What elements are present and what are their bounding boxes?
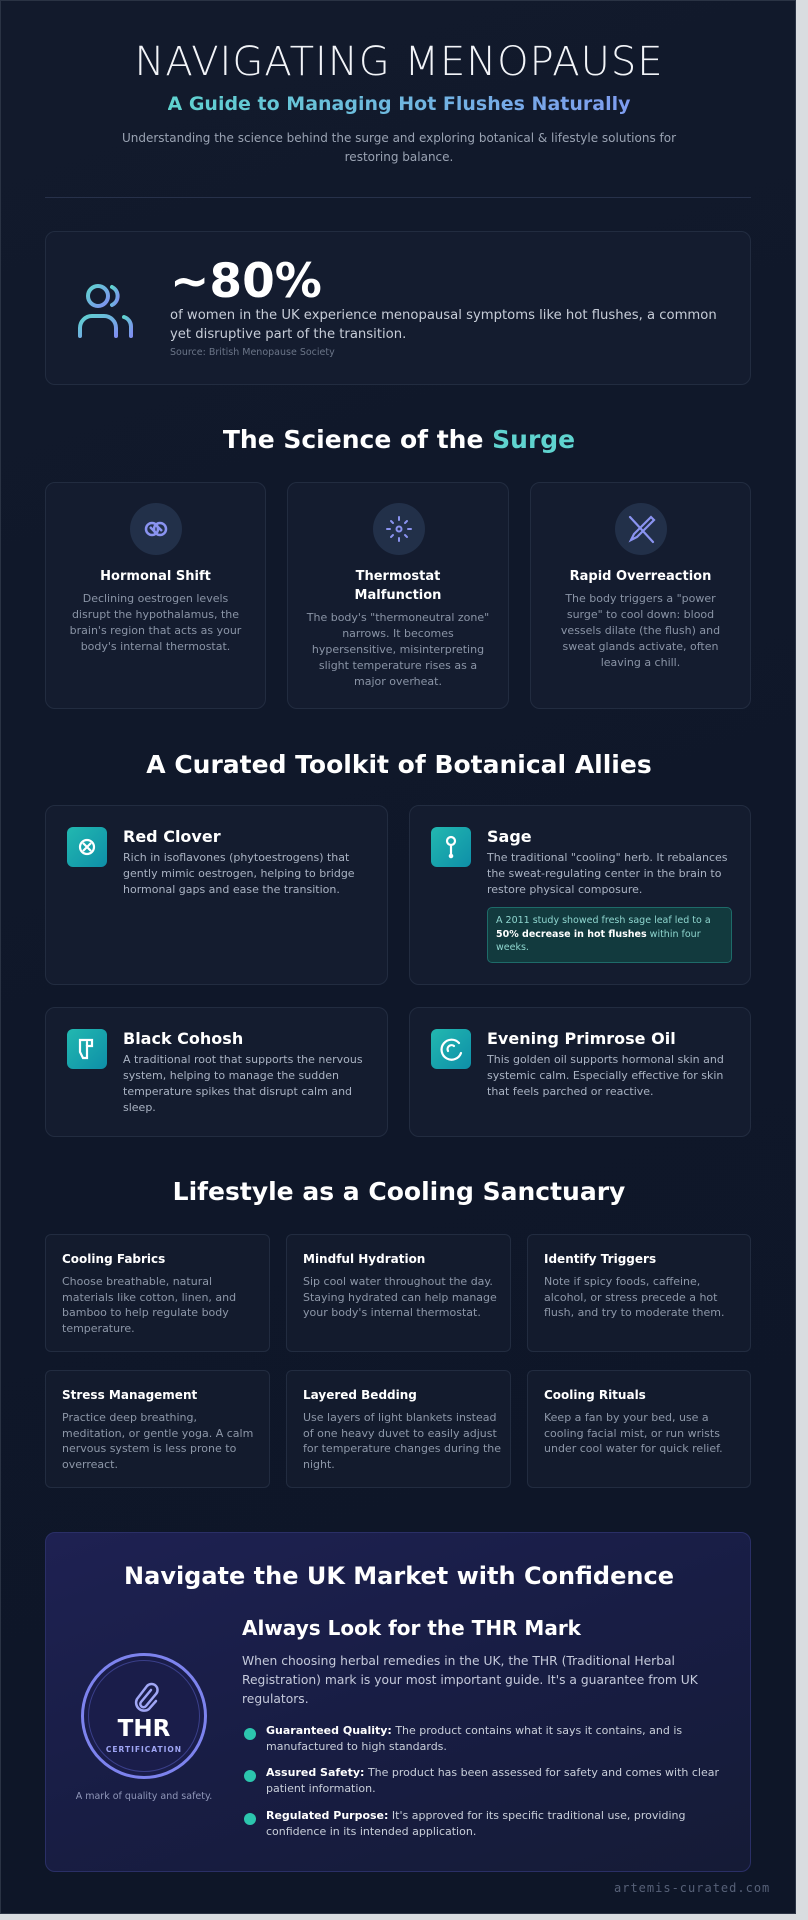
heading: lifestyle: Lifestyle as a Cooling Sanctuary (173, 1177, 625, 1206)
source: Source: British Menopause Society (170, 347, 335, 358)
card: stress management (45, 1370, 270, 1488)
card: cooling fabrics: materials like cotton, linen, and (62, 1290, 236, 1304)
badge: THR: CERTIFICATION (106, 1745, 182, 1754)
panel: thermostat: major overheat. (354, 675, 442, 688)
card: identify triggers (527, 1234, 751, 1352)
card: cooling fabrics: temperature. (62, 1322, 135, 1334)
panel: hormonal shift: disrupt the hypothalamus, the (72, 608, 239, 621)
card: identify triggers: Note if spicy foods, caffeine, (544, 1275, 700, 1288)
card: cooling fabrics: Cooling Fabrics (62, 1252, 165, 1266)
subheading: THR mark: Always Look for the THR Mark (242, 1616, 581, 1640)
icon: clover (67, 827, 107, 867)
panel: hormonal shift (45, 482, 266, 709)
panel: rapid overreaction: surge" to cool down: blood (567, 608, 714, 621)
panel: evening primrose: that feels parched or reactive. (487, 1085, 654, 1098)
panel: black cohosh: A traditional root that supports the nervous (123, 1053, 363, 1066)
panel: rapid overreaction: The body triggers a "power (565, 592, 716, 605)
card: layered bedding (286, 1370, 511, 1488)
card: mindful hydration: Mindful Hydration (303, 1252, 425, 1266)
icon: users (78, 284, 133, 338)
panel: rapid overreaction: vessels dilate (the flush) and (561, 624, 720, 637)
intro text: Understanding the science behind the surge and exploring botanical & lifestyle solutions for (122, 131, 676, 145)
icon: root (67, 1029, 107, 1069)
subtitle: A Guide to Managing Hot Flushes Naturally (168, 93, 630, 115)
stat number: ~80% (170, 254, 322, 309)
panel: evening primrose (409, 1007, 751, 1137)
card: mindful hydration (286, 1234, 511, 1352)
card: cooling rituals: Keep a fan by your bed, use a (544, 1411, 709, 1424)
callout: sage study (487, 907, 732, 963)
panel: black cohosh: sleep. (123, 1101, 156, 1114)
panel: rapid overreaction: sweat glands activate, often (563, 640, 718, 653)
badge: THR: THR (118, 1716, 170, 1742)
panel: black cohosh: Black Cohosh (123, 1029, 243, 1048)
bullet: safety: patient information. (266, 1782, 376, 1795)
panel: thermostat: hypersensitive, misinterpreting (312, 643, 484, 656)
card: layered bedding: Layered Bedding (303, 1388, 417, 1402)
card: identify triggers: flush, and try to moderate them. (544, 1306, 724, 1319)
panel: black cohosh: temperature spikes that disrupt calm and (123, 1085, 352, 1098)
card: cooling fabrics: bamboo to help regulate body (62, 1306, 229, 1319)
stat text (170, 308, 717, 342)
panel: black cohosh (45, 1007, 388, 1137)
panel: rapid overreaction: Rapid Overreaction (570, 569, 711, 584)
heading: UK market: Navigate the UK Market with Confidence (124, 1562, 674, 1590)
panel: sage: Sage (487, 827, 532, 846)
card: mindful hydration: Sip cool water throughout the day. (303, 1275, 493, 1288)
panel: hormonal shift: Declining oestrogen levels (83, 592, 228, 605)
stat card (45, 231, 751, 385)
panel: red clover: Rich in isoflavones (phytoestrogens) that (123, 851, 349, 864)
panel: red clover (45, 805, 388, 985)
bullet: quality (244, 1724, 682, 1753)
bullet: safety (244, 1766, 719, 1795)
panel: thermostat: Thermostat (356, 569, 440, 584)
badge: THR (81, 1653, 207, 1779)
panel: red clover: gently mimic oestrogen, helping to bridge (123, 867, 355, 880)
panel: sage (409, 805, 751, 985)
card: layered bedding: for temperature changes during the (303, 1442, 501, 1455)
icon: paperclip (134, 1682, 159, 1712)
paragraph: Registration) mark is your most important guide. It's a guarantee from UK (242, 1673, 698, 1687)
card: mindful hydration: your body's internal thermostat. (303, 1306, 481, 1319)
paragraph: When choosing herbal remedies in the UK, the THR (Traditional Herbal (242, 1654, 675, 1668)
card: stress management: overreact. (62, 1458, 118, 1470)
panel: hormonal shift: Hormonal Shift (100, 569, 211, 584)
panel: thermostat: slight temperature rises as a (319, 659, 477, 672)
bullet: purpose: confidence in its intended application. (266, 1825, 476, 1838)
panel: thermostat: narrows. It becomes (342, 627, 454, 640)
heading: science: The Science of the Surge (223, 425, 575, 454)
panel: hormonal shift: brain's region that acts as your (70, 624, 241, 637)
card: mindful hydration: Staying hydrated can help manage (303, 1290, 497, 1304)
card: cooling rituals: Cooling Rituals (544, 1388, 646, 1402)
card: stress management: meditation, or gentle yoga. A calm (62, 1426, 253, 1440)
panel: black cohosh: system, helping to manage the sudden (123, 1069, 339, 1082)
bullet: quality: Guaranteed Quality: The product contains what it says it contains, and is (266, 1724, 682, 1737)
panel: rapid overreaction (530, 482, 751, 709)
card: cooling fabrics: Choose breathable, natural (62, 1275, 212, 1288)
panel: evening primrose: This golden oil supports hormonal skin and (487, 1053, 724, 1066)
bullet: purpose: Regulated Purpose: It's approved for its specific traditional use, providing (266, 1809, 685, 1822)
paragraph (242, 1654, 698, 1706)
card: identify triggers: Identify Triggers (544, 1252, 656, 1266)
callout: sage study: A 2011 study showed fresh sage leaf led to a (496, 915, 711, 926)
icon: sage (431, 827, 471, 867)
card: stress management: Stress Management (62, 1388, 197, 1402)
intro text (122, 131, 676, 164)
panel: thermostat: Malfunction (355, 588, 441, 603)
card: cooling rituals: under cool water for quick relief. (544, 1442, 723, 1455)
card: layered bedding: night. (303, 1458, 335, 1470)
icon: syringe (615, 503, 667, 555)
panel: rapid overreaction: leaving a chill. (601, 656, 680, 669)
panel: thermostat (287, 482, 509, 709)
heading: toolkit: A Curated Toolkit of Botanical Allies (146, 750, 652, 779)
panel: sage: restore physical composure. (487, 883, 642, 896)
paragraph: regulators. (242, 1692, 309, 1706)
bullet: safety: Assured Safety: The product has been assessed for safety and comes with clear (266, 1766, 719, 1779)
stat text: of women in the UK experience menopausal symptoms like hot flushes, a common (170, 308, 717, 323)
icon: oil swirl (431, 1029, 471, 1069)
card: cooling rituals (527, 1370, 751, 1488)
panel: thermostat: The body's "thermoneutral zone" (307, 611, 489, 624)
bullet: purpose (244, 1809, 685, 1838)
panel: sage: the sweat-regulating center in the brain to (487, 867, 721, 880)
panel: red clover: Red Clover (123, 827, 221, 846)
panel: sage: The traditional "cooling" herb. It rebalances (487, 851, 728, 864)
card: identify triggers: alcohol, or stress precede a hot (544, 1290, 717, 1304)
title: NAVIGATING MENOPAUSE (134, 39, 664, 85)
bullet: quality: manufactured to high standards. (266, 1740, 447, 1753)
caption: A mark of quality and safety. (76, 1791, 212, 1802)
card: layered bedding: Use layers of light blankets instead (303, 1411, 496, 1424)
card: layered bedding: of one heavy duvet to easily adjust (303, 1426, 497, 1440)
icon: thermostat (373, 503, 425, 555)
panel: evening primrose: Evening Primrose Oil (487, 1029, 676, 1048)
icon: hormone (130, 503, 182, 555)
card: stress management: nervous system is less prone to (62, 1442, 236, 1455)
panel: red clover: hormonal gaps and ease the transition. (123, 883, 340, 896)
panel: UK market (45, 1532, 751, 1872)
card: cooling rituals: cooling facial mist, or run wrists (544, 1426, 720, 1440)
callout: sage study: weeks. (496, 942, 529, 953)
stat text: yet disruptive part of the transition. (170, 327, 406, 342)
panel: hormonal shift: body's internal thermostat. (81, 640, 230, 653)
panel: evening primrose: systemic calm. Especially effective for skin (487, 1069, 723, 1082)
footer: artemis-curated.com (614, 1881, 770, 1895)
card: stress management: Practice deep breathing, (62, 1411, 197, 1424)
callout: sage study: 50% decrease in hot flushes within four (496, 928, 701, 940)
intro text: restoring balance. (345, 150, 453, 164)
card: cooling fabrics (45, 1234, 270, 1352)
